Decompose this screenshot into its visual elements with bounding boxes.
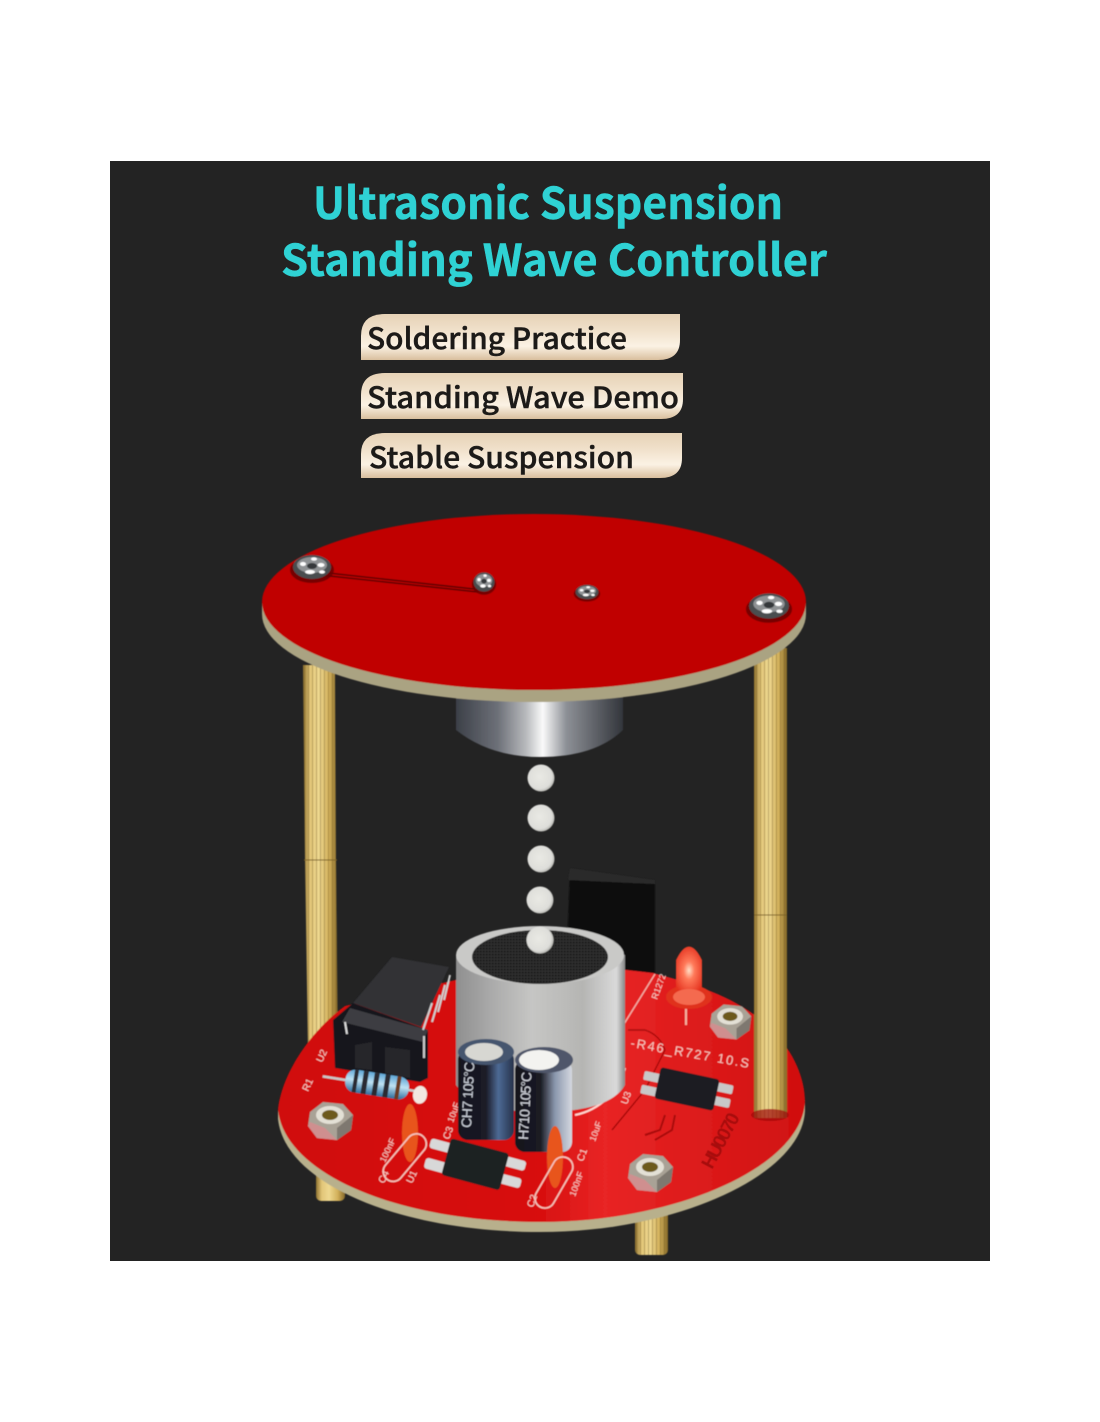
product: ultrasonic levitation kit bbox=[262, 514, 806, 1255]
silkscreen designators: C2 bbox=[525, 1193, 540, 1209]
hex nut (front) bbox=[628, 1154, 673, 1192]
screw right bbox=[746, 593, 792, 623]
silkscreen designators: C1 bbox=[575, 1147, 590, 1163]
bottom circuit board bbox=[278, 960, 805, 1232]
bottom hex nut (right rear) bbox=[710, 1004, 751, 1039]
feature label: Stable Suspension: Stable Suspension bbox=[369, 435, 634, 477]
electrolytic capacitors bbox=[458, 1039, 573, 1152]
title: Ultrasonic Suspension bbox=[313, 168, 783, 232]
wire trace bbox=[310, 571, 483, 592]
ultrasonic transducer (bottom) bbox=[456, 926, 625, 1112]
silkscreen designators: U2 bbox=[315, 1048, 330, 1064]
silkscreen traces bbox=[575, 974, 675, 1140]
screw left bbox=[290, 555, 334, 583]
title bbox=[281, 168, 828, 289]
silkscreen designators: R1272 bbox=[649, 972, 668, 1001]
silkscreen designators bbox=[301, 972, 668, 1209]
solder point centre-left bbox=[472, 572, 496, 595]
levitating foam balls bbox=[526, 764, 554, 954]
orange ceramic capacitors bbox=[379, 1104, 577, 1212]
top circuit board bbox=[262, 514, 806, 702]
colour-band resistor bbox=[321, 1065, 429, 1105]
electrolytic capacitors: H710 105°C bbox=[515, 1071, 535, 1140]
solder point centre-right bbox=[574, 585, 600, 602]
right brass standoff bbox=[751, 648, 789, 1121]
board edge bbox=[278, 1100, 805, 1232]
black power connector bbox=[565, 868, 655, 1002]
silkscreen designators: U1 bbox=[405, 1169, 420, 1185]
DIP chip on black socket bbox=[333, 957, 450, 1082]
silkscreen designators: 10uF bbox=[587, 1120, 604, 1143]
silkscreen designators: C4 bbox=[377, 1169, 392, 1185]
silkscreen designators: 100nF bbox=[378, 1136, 398, 1164]
dark background panel bbox=[110, 161, 990, 1261]
SOP chip U1 bbox=[423, 1133, 527, 1195]
hex nut (left) bbox=[308, 1102, 353, 1140]
electrolytic capacitors: CH7 105°C bbox=[458, 1061, 477, 1128]
hatch marking: HU0070 bbox=[698, 1110, 745, 1172]
board serial text: -R46_R727 10.S bbox=[629, 1035, 751, 1071]
feature label: Standing Wave Demo: Standing Wave Demo bbox=[367, 375, 679, 417]
left brass standoff bbox=[303, 665, 338, 1052]
silkscreen designators: R1 bbox=[301, 1077, 316, 1093]
title: Standing Wave Controller bbox=[281, 225, 828, 289]
red top surface bbox=[262, 514, 806, 690]
red LED bbox=[666, 946, 712, 1025]
rear mounting pins under bottom board bbox=[316, 1165, 668, 1255]
red solder mask bbox=[278, 960, 805, 1222]
silkscreen designators: 10uF bbox=[445, 1101, 462, 1124]
SOP chip U3 bbox=[640, 1064, 734, 1114]
silkscreen designators: U3 bbox=[619, 1090, 634, 1106]
ultrasonic transducer (top) bbox=[456, 690, 623, 757]
board edge bbox=[262, 602, 806, 702]
silkscreen designators: C3 bbox=[441, 1125, 456, 1141]
feature label: Soldering Practice: Soldering Practice bbox=[367, 316, 627, 358]
silkscreen designators: 100nF bbox=[567, 1170, 586, 1198]
